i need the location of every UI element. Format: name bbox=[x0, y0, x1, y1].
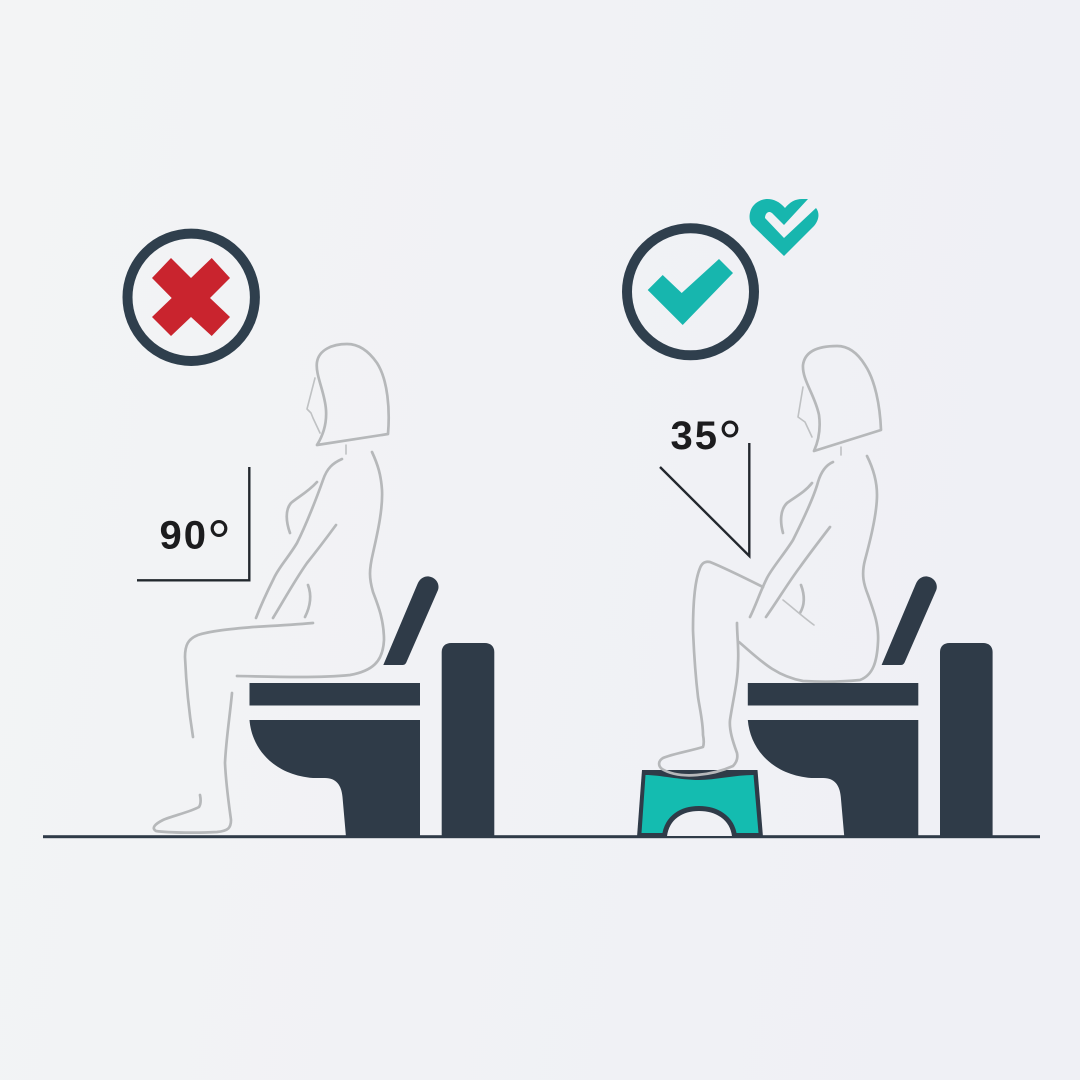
footstool bbox=[637, 770, 763, 837]
figure: woman sitting at 35 degrees bbox=[659, 346, 881, 775]
angle marker: 35 degrees: 35 bbox=[670, 414, 719, 458]
panel: correct posture bbox=[627, 199, 993, 837]
ground line bbox=[43, 835, 1040, 838]
toilet: upright seated side bbox=[250, 576, 494, 837]
angle marker: 90 degrees: ° bbox=[207, 508, 233, 576]
angle marker: 90 degrees: 90 bbox=[160, 514, 208, 558]
panel: incorrect posture bbox=[128, 234, 494, 837]
icon: teal check in circle bbox=[627, 228, 754, 355]
angle marker: 35 degrees: ° bbox=[718, 409, 744, 476]
figure: woman sitting at 90 degrees bbox=[154, 344, 389, 833]
toilet: seated side with footstool bbox=[748, 576, 993, 837]
angle marker: 35 degrees bbox=[660, 409, 749, 556]
icon: red cross in circle bbox=[128, 234, 255, 361]
icon: teal heart check bbox=[750, 199, 818, 256]
angle marker: 90 degrees bbox=[137, 467, 249, 580]
